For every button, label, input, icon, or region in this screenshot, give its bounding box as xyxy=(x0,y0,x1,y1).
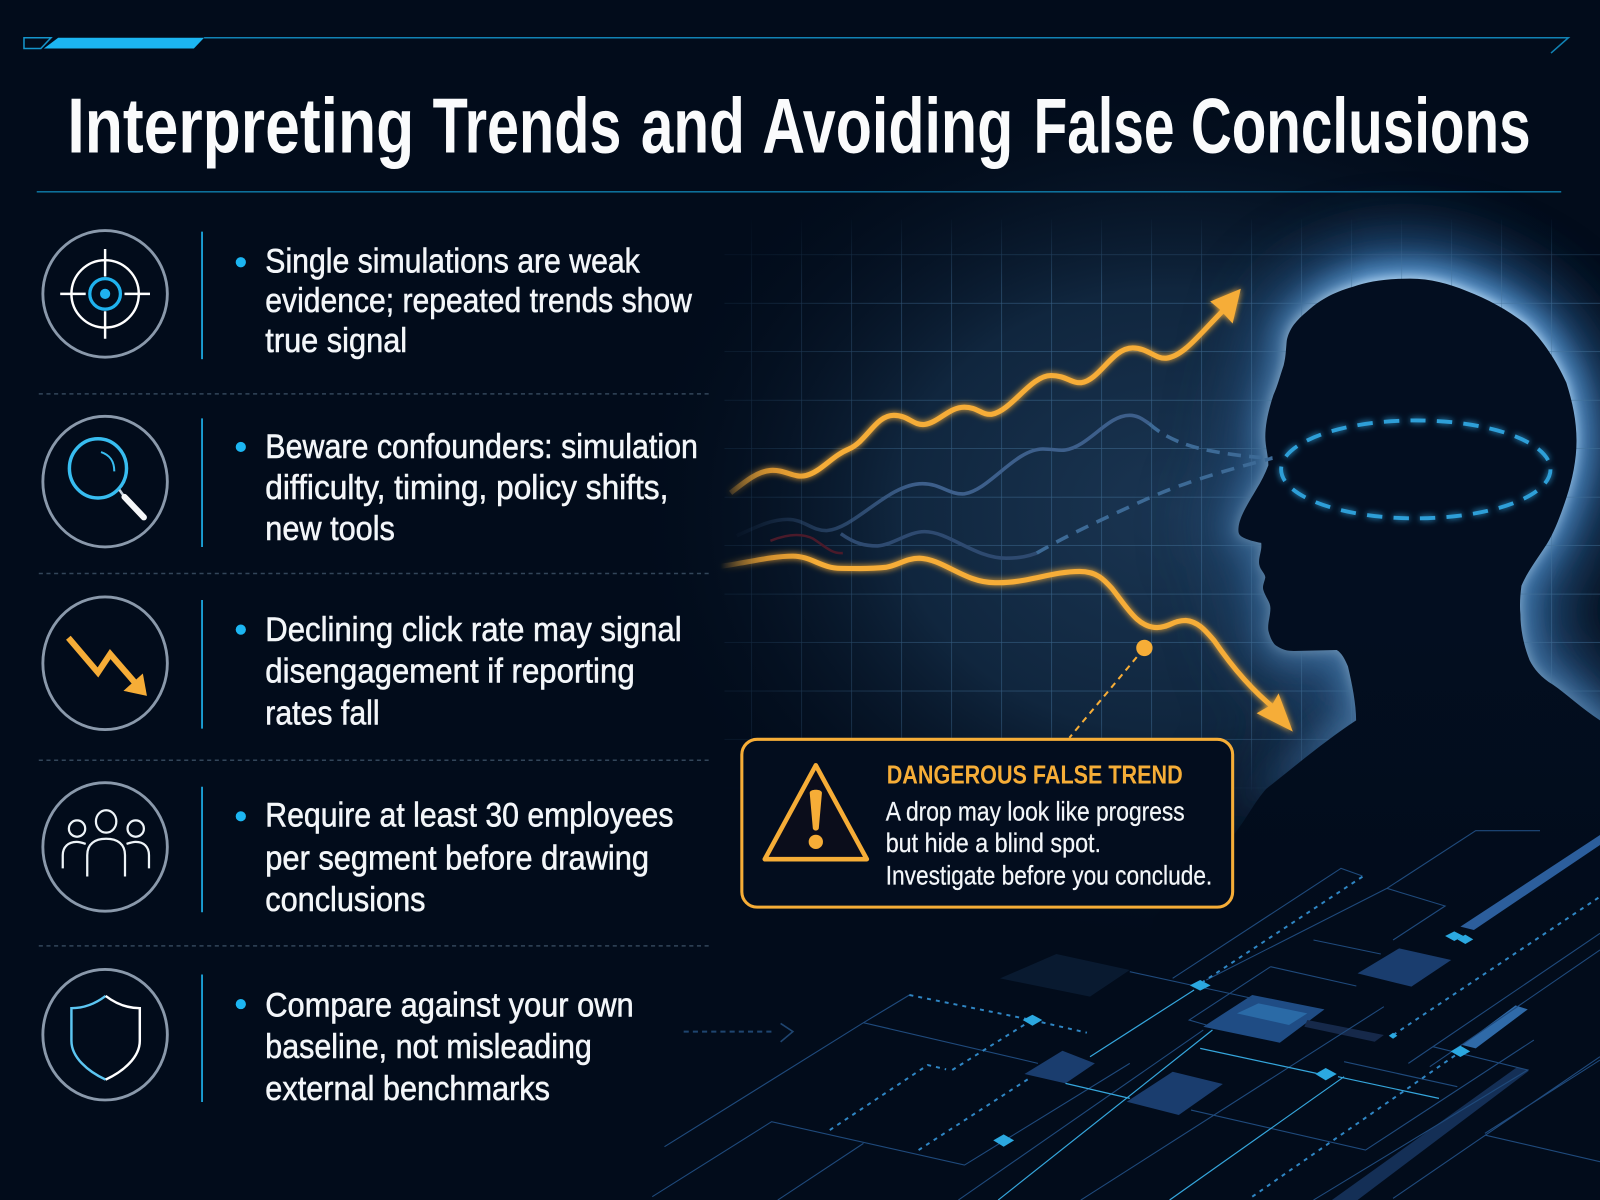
title: Interpreting xyxy=(67,84,414,170)
trend line: falling xyxy=(720,556,1293,732)
callout pointer xyxy=(1069,640,1153,738)
icon: shield xyxy=(43,969,167,1100)
panel: key points list xyxy=(39,231,709,1108)
title: Trends xyxy=(433,84,621,170)
icon: declining arrow xyxy=(43,597,167,730)
trend line: mid blue xyxy=(737,415,1272,558)
arrow: dashed pointer xyxy=(684,1023,793,1042)
illustration: head glow xyxy=(1193,202,1600,815)
text: single simulations: evidence; repeated trends show xyxy=(265,282,692,320)
text: confounders: Beware confounders: simulation xyxy=(265,428,698,466)
icon: magnifier xyxy=(43,416,167,547)
title: Avoiding xyxy=(762,84,1013,170)
title: and xyxy=(641,84,745,170)
text: single simulations: true signal xyxy=(265,322,407,360)
illustration: head silhouette xyxy=(1122,279,1600,1200)
text: baseline: external benchmarks xyxy=(265,1070,550,1108)
icon: target xyxy=(43,231,167,357)
title: False xyxy=(1034,84,1174,170)
text: declining click rate: disengagement if reporting xyxy=(265,653,635,691)
trend line: rising xyxy=(731,289,1241,493)
chart grid xyxy=(724,219,1600,791)
text: sample size: conclusions xyxy=(265,881,426,919)
icon: people xyxy=(43,783,167,911)
text: sample size: per segment before drawing xyxy=(265,839,649,877)
row: declining click rate xyxy=(43,597,691,732)
row: confounders xyxy=(43,416,707,548)
text: single simulations: Single simulations are weak xyxy=(265,242,641,280)
text: baseline: baseline, not misleading xyxy=(265,1028,592,1066)
callout: dangerous false trend xyxy=(742,739,1233,907)
text: baseline: Compare against your own xyxy=(265,986,634,1024)
icon: warning triangle xyxy=(765,765,867,859)
row: baseline xyxy=(43,969,643,1108)
callout text: Investigate before you conclude. xyxy=(886,861,1212,891)
text: sample size: Require at least 30 employees xyxy=(265,797,673,835)
blind spot ellipse xyxy=(1281,420,1551,518)
row: sample size xyxy=(43,783,683,919)
text: confounders: difficulty, timing, policy shifts, xyxy=(265,469,668,507)
text: declining click rate: rates fall xyxy=(265,694,380,732)
top header bar xyxy=(24,38,1568,53)
callout heading: DANGEROUS FALSE TREND xyxy=(887,762,1183,790)
illustration: circuit board xyxy=(652,831,1600,1200)
callout text: but hide a blind spot. xyxy=(886,828,1101,858)
row: single simulations xyxy=(43,231,701,360)
title divider xyxy=(37,191,1561,193)
text: declining click rate: Declining click rate may signal xyxy=(265,611,682,649)
text: confounders: new tools xyxy=(265,510,395,548)
callout text: A drop may look like progress xyxy=(886,796,1185,826)
